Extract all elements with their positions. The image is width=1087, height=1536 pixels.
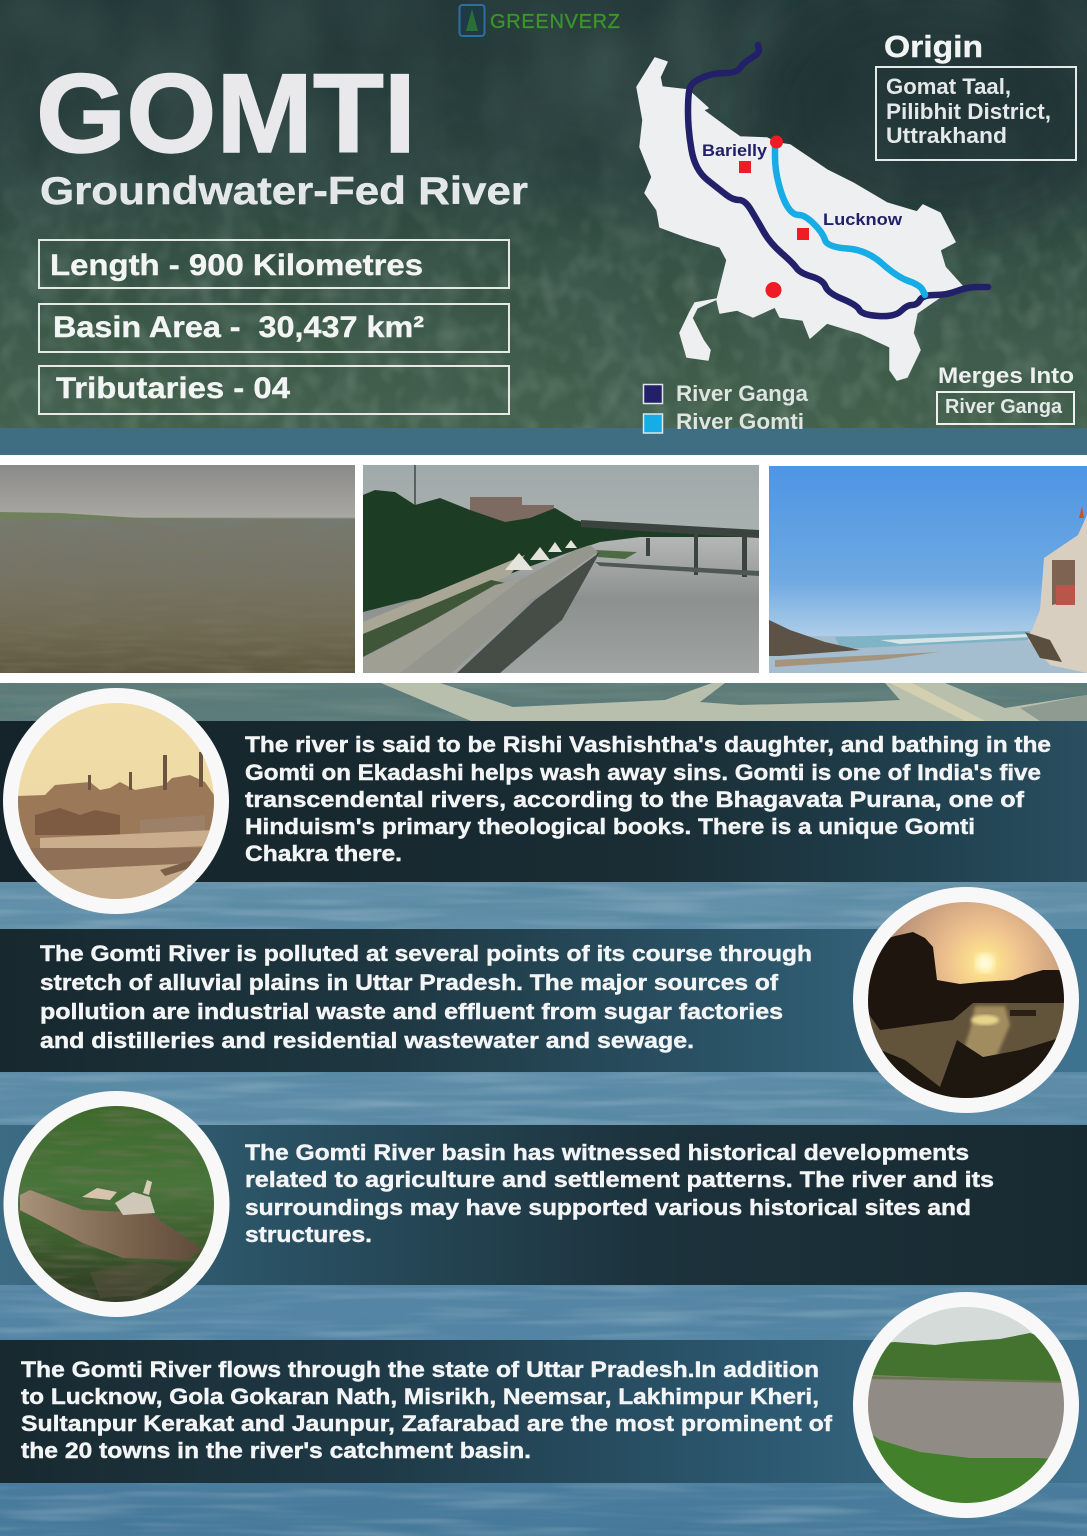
circle photo: river with green banks (853, 1292, 1079, 1518)
stat: basin area: Basin Area - 30,437 km² (53, 311, 424, 344)
panel: header with forest background (0, 0, 1087, 455)
legend: River Gomti (676, 409, 804, 434)
text block 1: Chakra there. (245, 841, 402, 866)
panel: water background (0, 683, 1087, 1536)
text block 4 (21, 1357, 833, 1463)
circle photo: sunset (853, 887, 1079, 1113)
text block 3 (245, 1140, 994, 1247)
text block 2: and distilleries and residential wastewater and sewage. (40, 1028, 694, 1053)
river Gomti line (775, 143, 925, 295)
map outline (637, 58, 963, 380)
marker: Lucknow (797, 228, 809, 240)
text block 3: surroundings may have supported various historical sites and (245, 1195, 971, 1220)
merges into box (937, 392, 1074, 424)
stat: basin area (39, 304, 509, 352)
logo: Greenverz (460, 5, 620, 36)
river Ganga line (688, 45, 988, 316)
text block 2: stretch of alluvial plains in Uttar Pradesh. The major sources of (40, 970, 779, 995)
origin box: Uttrakhand (886, 123, 1007, 148)
merges into heading: Merges Into (938, 363, 1074, 388)
text block 1 (245, 732, 1051, 866)
gharial image (381, 683, 1087, 721)
logo: Greenverz: GREENVERZ (490, 11, 620, 33)
stat: tributaries: Tributaries - 04 (56, 372, 290, 405)
origin box (876, 67, 1076, 160)
band 1 (0, 721, 1087, 882)
stat: tributaries (39, 366, 509, 414)
band 4 (0, 1340, 1087, 1483)
text block 4: to Lucknow, Gola Gokaran Nath, Misrikh, Neemsar, Lakhimpur Kheri, (21, 1384, 819, 1409)
marker: south (766, 282, 782, 298)
text block 4: The Gomti River flows through the state of Uttar Pradesh.In addition (21, 1357, 819, 1382)
band 3 (0, 1125, 1087, 1285)
text block 3: The Gomti River basin has witnessed historical developments (245, 1140, 969, 1165)
text block 3: structures. (245, 1222, 372, 1247)
map: Uttar Pradesh with rivers (637, 45, 988, 380)
text block 2: The Gomti River is polluted at several points of its course through (40, 941, 812, 966)
circle photo: turtle on log (4, 1091, 230, 1317)
text block 3: related to agriculture and settlement patterns. The river and its (245, 1167, 994, 1192)
title: GOMTI (36, 51, 416, 176)
legend (644, 381, 809, 434)
stat: length: Length - 900 Kilometres (50, 249, 423, 282)
label: Lucknow: Lucknow (823, 210, 903, 229)
text block 1: transcendental rivers, according to the Bhagavata Purana, one of (245, 787, 1025, 812)
text block 1: Hinduism's primary theological books. There is a unique Gomti (245, 814, 975, 839)
text block 4: Sultanpur Kerakat and Jaunpur, Zafarabad are the most prominent of (21, 1411, 833, 1436)
text block 4: the 20 towns in the river's catchment basin. (21, 1438, 531, 1463)
photo: riverfront and bridge (363, 465, 759, 673)
text block 1: The river is said to be Rishi Vashishtha's daughter, and bathing in the (245, 732, 1051, 757)
origin box: Pilibhit District, (886, 99, 1051, 124)
text block 2: pollution are industrial waste and effluent from sugar factories (40, 999, 783, 1024)
stat: length (39, 240, 509, 288)
subtitle: Groundwater-Fed River (40, 170, 528, 213)
circle photo: historic city (3, 688, 229, 914)
band 2 (0, 929, 1087, 1072)
photo: wide river (0, 465, 355, 673)
marker: Barielly (739, 161, 751, 173)
photo: sea and temple (769, 466, 1087, 673)
origin heading: Origin (884, 29, 983, 64)
merges into box: River Ganga (945, 396, 1063, 418)
label: Barielly: Barielly (702, 141, 768, 160)
legend: River Ganga (676, 381, 809, 406)
marker: origin (770, 136, 783, 148)
text block 2 (40, 941, 812, 1053)
text block 1: Gomti on Ekadashi helps wash away sins. Gomti is one of India's five (245, 760, 1041, 785)
origin box: Gomat Taal, (886, 74, 1011, 99)
